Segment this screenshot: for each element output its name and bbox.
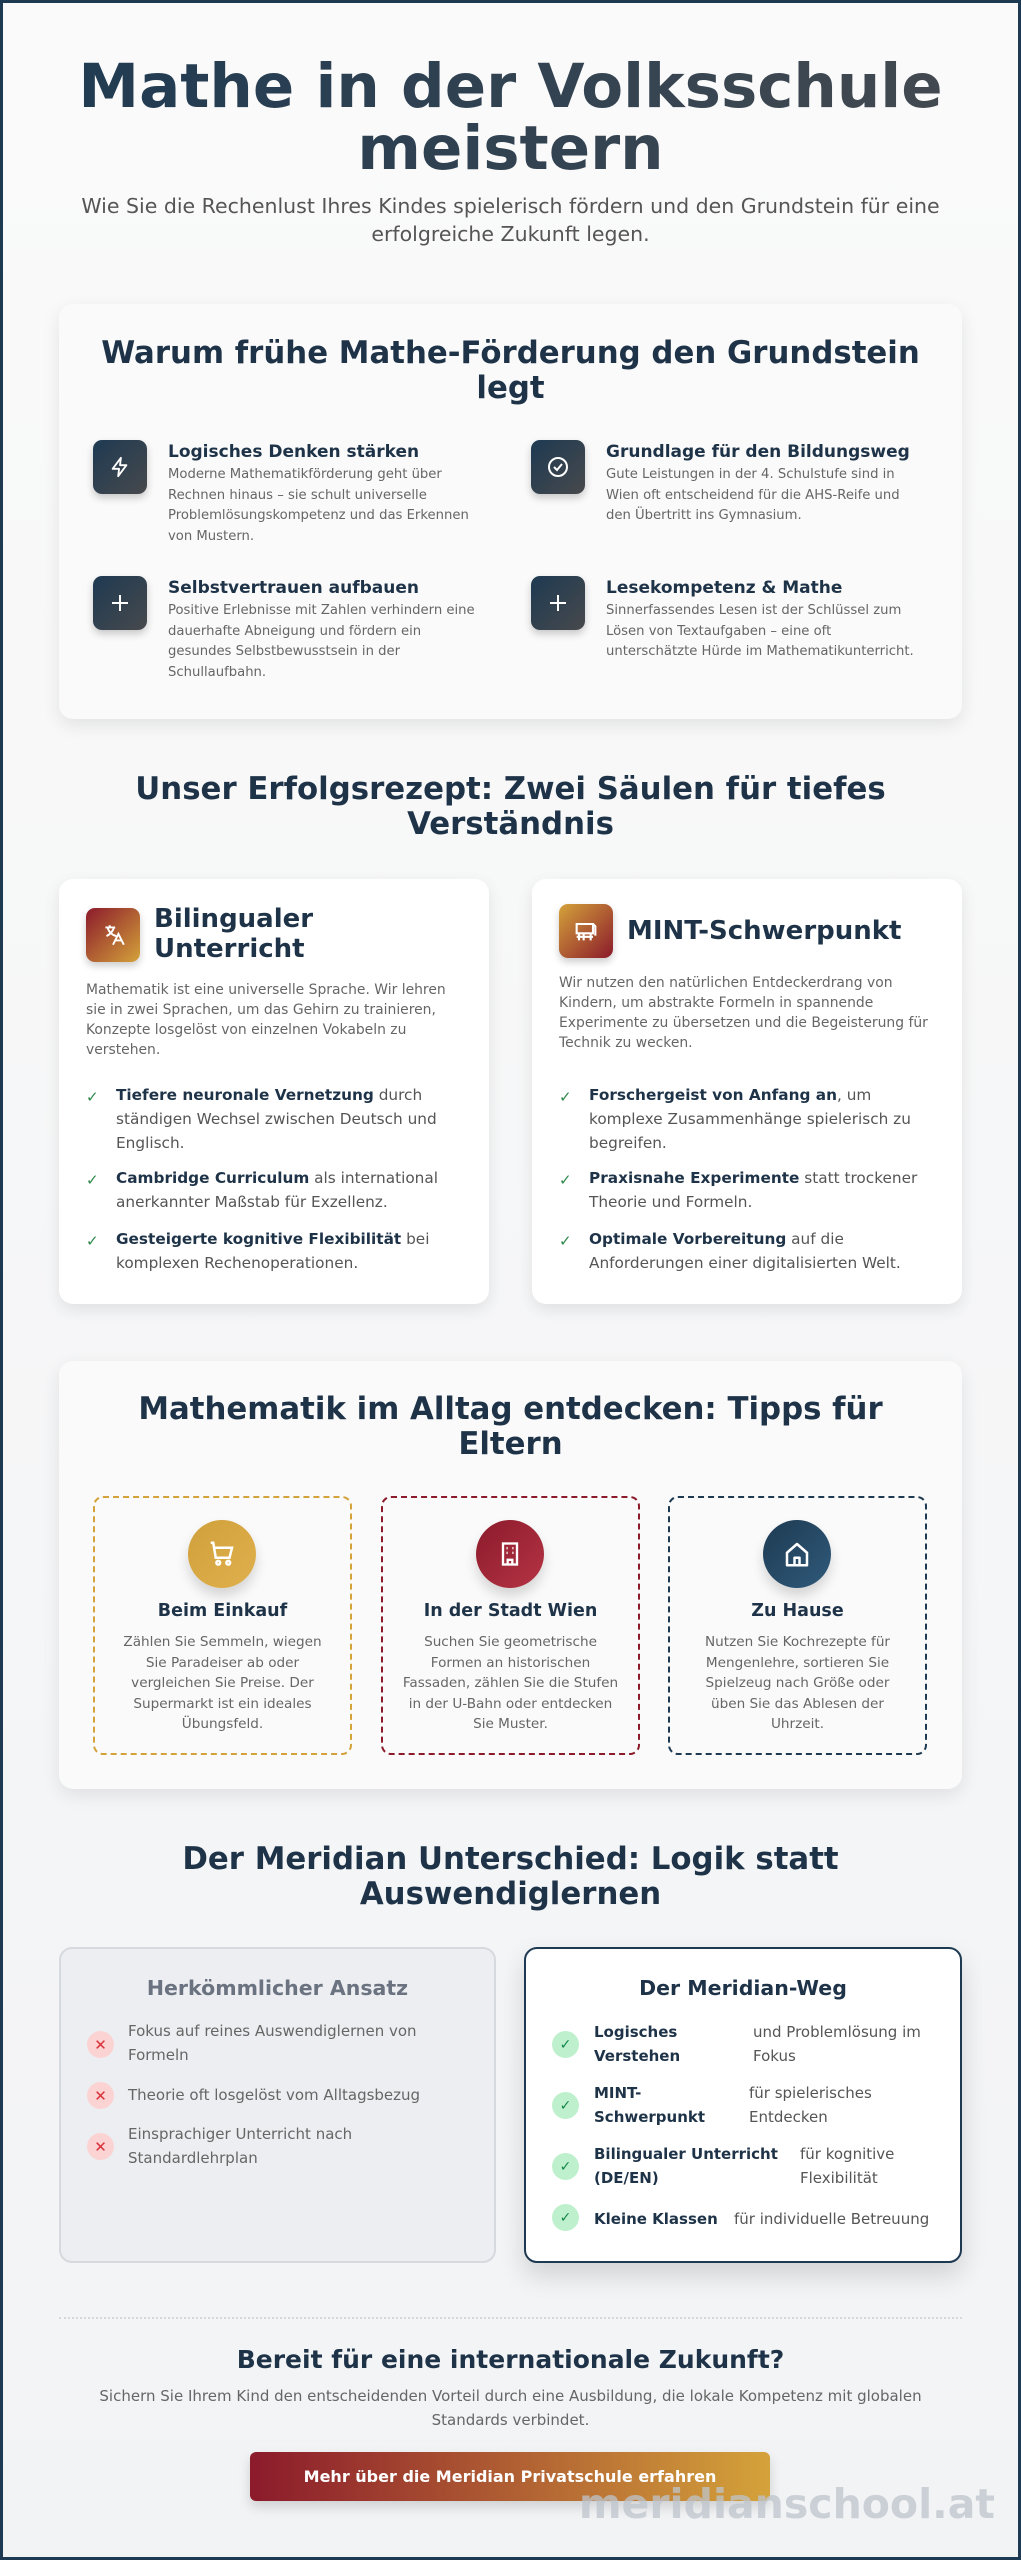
tip: home xyxy=(668,1496,927,1755)
tip: city: Sie Muster. xyxy=(473,1716,548,1732)
comparison: meridian: für kognitive xyxy=(800,2145,894,2163)
heading: tips: Eltern xyxy=(458,1426,563,1462)
card title: MINT-Schwerpunkt xyxy=(627,916,902,946)
comparison: traditional: Einsprachiger Unterricht nach Standardlehrplan xyxy=(128,2125,352,2167)
heading: difference: Auswendiglernen xyxy=(360,1876,661,1912)
comparison: traditional: Fokus auf reines Auswendiglernen von Formeln xyxy=(128,2022,417,2064)
comparison: meridian: MINT- xyxy=(594,2084,641,2102)
tip: city: Formen an historischen xyxy=(431,1654,590,1670)
comparison: meridian: ✓ xyxy=(560,2098,571,2114)
comparison: meridian: für spielerisches xyxy=(749,2084,872,2102)
panel: why early math xyxy=(59,304,962,719)
tip: city: Suchen Sie geometrische xyxy=(424,1634,597,1650)
panel: why early math: Selbstvertrauen aufbauen xyxy=(168,578,419,598)
comparison: meridian: für individuelle Betreuung xyxy=(734,2210,929,2228)
icon: house xyxy=(763,1520,831,1588)
comparison: meridian: ✓ xyxy=(560,2158,571,2174)
comparison: meridian: ✓ xyxy=(560,2210,571,2226)
panel: why early math: Lesekompetenz & Mathe xyxy=(606,578,842,598)
comparison: traditional: ✕ xyxy=(94,2086,107,2104)
comparison: traditional xyxy=(59,1947,496,2263)
CTA button: Mehr über die Meridian Privatschule erfahren xyxy=(304,2467,716,2486)
panel: why early math: Moderne Mathematikförderung geht über Rechnen hinaus – sie schult universelle Problemlösungskompetenz und das Erkennen von Mustern. xyxy=(168,467,469,544)
icon: plus xyxy=(531,576,585,630)
card title xyxy=(154,904,313,964)
icon: flask/bench xyxy=(559,904,613,958)
comparison: meridian: Logisches xyxy=(594,2023,677,2041)
comparison: meridian: Schwerpunkt xyxy=(594,2108,705,2126)
heading: why: Warum frühe Mathe-Förderung den Grundstein xyxy=(101,335,920,371)
panel: why early math: Positive Erlebnisse mit Zahlen verhindern eine dauerhafte Abneigung und fördern ein gesundes Selbstbewusstsein in der Schullaufbahn. xyxy=(168,603,475,680)
comparison: traditional: Theorie oft losgelöst vom Alltagsbezug xyxy=(128,2086,420,2104)
heading: difference: Der Meridian Unterschied: Logik statt xyxy=(182,1841,839,1877)
dotted divider xyxy=(59,2317,962,2319)
comparison: meridian: (DE/EN) xyxy=(594,2169,659,2187)
comparison: meridian: Kleine Klassen xyxy=(594,2210,718,2228)
tip: city xyxy=(381,1496,640,1755)
panel: everyday tips xyxy=(59,1361,962,1789)
card description: Mathematik ist eine universelle Sprache. Wir lehren sie in zwei Sprachen, um das Gehirn zu trainieren, Konzepte losgelöst von einzelnen Vokabeln zu verstehen. xyxy=(86,982,446,1058)
CTA heading: Bereit für eine internationale Zukunft? xyxy=(237,2345,784,2374)
title: Mathe in der Volksschule xyxy=(78,51,943,122)
heading: difference xyxy=(182,1841,839,1912)
title: Der Meridian-Weg xyxy=(639,1976,847,2000)
comparison: meridian: Entdecken xyxy=(749,2108,828,2126)
list item: Cambridge Curriculum als international anerkannter Maßstab für Exzellenz. xyxy=(116,1169,438,1211)
tip: city: in der U-Bahn oder entdecken xyxy=(409,1696,612,1712)
tip: city: In der Stadt Wien xyxy=(424,1601,597,1621)
panel: why early math: Logisches Denken stärken xyxy=(168,442,419,462)
panel: why early math: Grundlage für den Bildungsweg xyxy=(606,442,910,462)
card: bilingual xyxy=(59,879,489,1304)
icon: cart xyxy=(188,1520,256,1588)
card: MINT xyxy=(532,879,962,1304)
card title: Unterricht xyxy=(154,934,305,964)
heading: why: legt xyxy=(476,370,545,406)
list item: Tiefere neuronale Vernetzung durch ständigen Wechsel zwischen Deutsch und Englisch. xyxy=(116,1086,437,1152)
list item: Gesteigerte kognitive Flexibilität bei komplexen Rechenoperationen. xyxy=(116,1230,429,1272)
tip: shopping xyxy=(93,1496,352,1755)
comparison: meridian xyxy=(524,1947,962,2263)
title xyxy=(0,56,1021,180)
tip: shopping: Zählen Sie Semmeln, wiegen Sie Paradeiser ab oder vergleichen Sie Preise. Der Supermarkt ist ein ideales Übungsfeld. xyxy=(123,1634,322,1732)
CTA button xyxy=(250,2452,770,2501)
feature: Lesekompetenz xyxy=(528,576,914,659)
panel: why early math: unterschätzte Hürde im Mathematikunterricht. xyxy=(606,644,914,659)
list item: Praxisnahe Experimente statt trockener Theorie und Formeln. xyxy=(589,1169,917,1211)
icon: plus xyxy=(93,576,147,630)
watermark: meridianschool.at xyxy=(579,2480,995,2528)
title: Herkömmlicher Ansatz xyxy=(147,1976,408,2000)
panel: why early math: Sinnerfassendes Lesen ist der Schlüssel zum Lösen von Textaufgaben – eine oft xyxy=(606,603,901,638)
card title: Bilingualer xyxy=(154,904,313,934)
comparison: meridian: Flexibilität xyxy=(800,2169,878,2187)
CTA text: Sichern Sie Ihrem Kind den entscheidenden Vorteil durch eine Ausbildung, die lokale Kompetenz mit globalen Standards verbindet. xyxy=(99,2387,922,2429)
tip: home: Zu Hause xyxy=(751,1601,844,1621)
icon: building xyxy=(476,1520,544,1588)
list item: Forschergeist von Anfang an, um xyxy=(589,1086,871,1104)
feature: Selbstvertrauen xyxy=(90,576,475,680)
card description: Wir nutzen den natürlichen Entdeckerdrang von Kindern, um abstrakte Formeln in spannende Experimente zu übersetzen und die Begeisterung für Technik zu wecken. xyxy=(559,975,928,1051)
list item: komplexe Zusammenhänge spielerisch zu begreifen. xyxy=(589,1110,911,1152)
feature: logisches Denken xyxy=(90,440,469,544)
heading: why xyxy=(101,335,920,406)
icon: translate xyxy=(86,908,140,962)
feature: Grundlage xyxy=(528,440,910,523)
list item xyxy=(559,1083,929,1155)
heading: two pillars: Unser Erfolgsrezept: Zwei Säulen für tiefes xyxy=(135,771,886,807)
comparison: meridian: und Problemlösung im Fokus xyxy=(753,2023,921,2065)
comparison: meridian: Bilingualer Unterricht xyxy=(594,2145,778,2163)
tip: city: Fassaden, zählen Sie die Stufen xyxy=(403,1675,618,1691)
panel: why early math: Gute Leistungen in der 4. Schulstufe sind in Wien oft entscheidend für die AHS-Reife und den Übertritt ins Gymnasium. xyxy=(606,467,900,523)
heading: two pillars: Verständnis xyxy=(407,806,614,842)
heading: tips xyxy=(138,1391,883,1462)
tip: shopping: Beim Einkauf xyxy=(158,1601,287,1621)
tip: home: Nutzen Sie Kochrezepte für Mengenlehre, sortieren Sie Spielzeug nach Größe oder üben Sie das Ablesen der Uhrzeit. xyxy=(705,1634,890,1732)
comparison: traditional: ✕ xyxy=(94,2036,107,2054)
heading: tips: Mathematik im Alltag entdecken: Tipps für xyxy=(138,1391,883,1427)
subtitle: Wie Sie die Rechenlust Ihres Kindes spielerisch fördern und den Grundstein für eine erfolgreiche Zukunft legen. xyxy=(81,194,940,246)
comparison: meridian: ✓ xyxy=(560,2036,571,2052)
list item: Optimale Vorbereitung auf die Anforderungen einer digitalisierten Welt. xyxy=(589,1230,901,1272)
icon: check circle xyxy=(531,440,585,494)
comparison: meridian: Verstehen xyxy=(594,2047,680,2065)
heading: two pillars xyxy=(135,771,886,842)
comparison: traditional: ✕ xyxy=(94,2138,107,2156)
title: meistern xyxy=(357,113,664,184)
icon: lightning xyxy=(93,440,147,494)
